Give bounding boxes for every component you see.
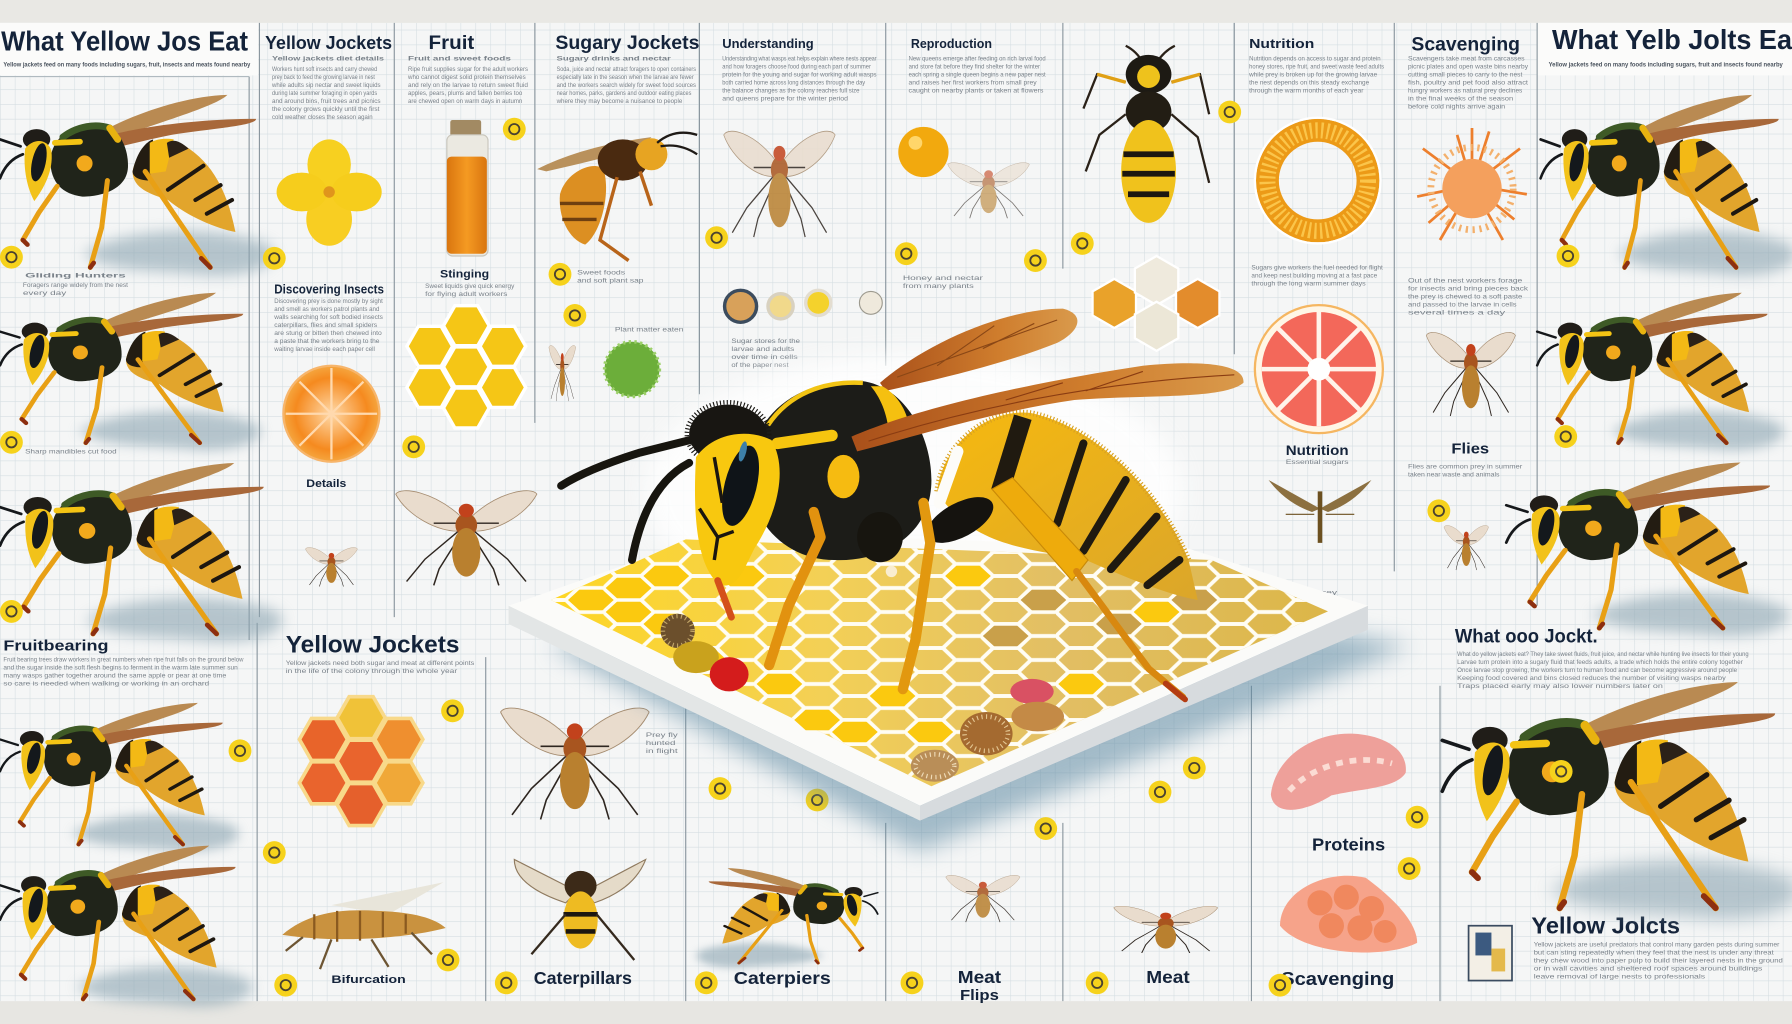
text block: scavenging top: fish, poultry and pet food also attract [1408,80,1528,87]
heading: fruitbearing: Fruitbearing [3,638,109,654]
text block: sugary middle: in flight [646,748,678,755]
text block: upper right [1457,651,1749,690]
text block: yellow jockets lower: Yellow jackets need both sugar and meat at different points [286,660,474,667]
text block: column two top: cold weather closes the season again [272,114,373,121]
text block: column four top: where they may become a nuisance to people [556,98,683,105]
right column wasps [1442,95,1792,919]
label: details: Details [306,478,346,490]
text block: sugary middle: and soft plant sap [577,277,644,284]
heading: understanding: Understanding [722,37,814,51]
icon: jar of syrup [447,120,488,256]
text block: upper right: Once larvae stop growing, the workers turn to human food and can become aggressive around people [1457,667,1738,674]
icon: small hex row [1093,256,1219,351]
icon: faint insect [948,163,1029,218]
text block: sugary middle: Prey fly [646,732,679,739]
text block: scavenging middle: and passed to the larvae in cells [1408,301,1517,308]
text block: moth notes: Moths and soft prey [1246,589,1338,596]
text block: fruitbearing: many wasps gather together around the same apple or pear at one time [3,673,227,680]
text block: discovering: waiting larvae inside each paper cell [273,346,375,353]
wasp right large [1442,682,1792,919]
text block: sugary middle [577,269,984,755]
wasp 4 [0,703,239,851]
label: bifurcation: Bifurcation [331,974,406,986]
text block: sugary middle: larvae and adults [731,346,794,353]
text block: under first wasp: Gliding Hunters [25,273,127,280]
icon: spider-like fly [1426,332,1515,416]
icon: small bug [305,548,357,587]
food morsels [661,614,1064,782]
text block: under first wasp: every day [23,290,68,297]
icon: long-legged insect [396,491,537,585]
text block: discovering: a paste that the workers bring to the [274,338,380,345]
lower wing [851,363,1244,451]
upper wing [880,309,1077,391]
icon: top-down wasp [1083,46,1209,223]
text block: nutrition middle: and keep nest building moving at a fast pace [1251,273,1378,280]
text block: column six top: caught on nearby plants or taken at flowers [909,88,1043,95]
text block: discovering: Discovering prey is done mostly by sight [274,298,383,305]
text block: scavenging top: in the final weeks of the season [1408,96,1514,103]
text block: column six top [909,56,1046,95]
coin markers [0,101,1579,997]
icon: salmon eggs [1280,876,1417,952]
text block: column eight top: honey stores, ripe fruit, and sweet waste feed adults [1249,64,1384,71]
thorax [749,381,931,577]
text block: column two top: Workers hunt soft insects and carry chewed [272,66,378,73]
honeycomb cells [551,539,1328,786]
text block: scavenging top: Scavengers take meat from carcasses [1408,56,1525,63]
text block: column eight top: Nutrition depends on access to sugar and protein [1249,56,1381,63]
text block: column six top: and raises her first workers from small prey [909,80,1037,87]
central honeycomb tray [509,531,1411,851]
text block: scavenging middle: several times a day [1408,309,1507,316]
wasp 5 [0,846,252,1007]
text block: column three top: who cannot digest solid protein themselves [407,74,526,81]
text block: under first wasp [23,273,128,297]
text block: upper right: Larvae turn protein into a sugary fluid that feeds adults, a trade which holds the entire colony together [1457,659,1744,666]
label: nutrition: Nutrition [1286,443,1349,458]
central yellow jacket [561,309,1244,699]
label: stinging: Stinging [440,269,489,281]
heading: fruit: Fruit [429,32,475,54]
text block: column four top: Sugary drinks and nectar [557,56,672,63]
text block: column five top: the balance changes as the colony reaches full size [722,88,860,95]
text block: lower right [1534,941,1783,980]
text block: column three top: and rely on the larvae to return sweet fluid [408,82,528,89]
text block: column two top: the colony grows quickly until the first [272,106,380,113]
icon: spindly bug [1114,906,1218,953]
heading: nutrition: Nutrition [1249,37,1314,51]
label: proteins: Proteins [1312,834,1385,854]
text block: column two top: prey back to feed the growing larvae in nest [272,74,375,81]
text block: column three top: Ripe fruit supplies sugar for the adult workers [408,66,528,73]
icon: small picture [1469,926,1512,981]
icon: orange burst [1417,128,1527,240]
text block: discovering: caterpillars, flies and small spiders [274,322,377,329]
text block: column six top: and store fat before they find shelter for the winter [909,64,1041,71]
text block: column three top [407,56,528,105]
text block: scavenging middle: for insects and bring pieces back [1408,285,1529,292]
text block: upper right: Traps placed early may also lower numbers later on [1457,683,1663,690]
text block: column six top: each spring a single queen begins a new paper nest [909,72,1046,79]
text block: column two top: during late summer foraging in open yards [272,90,377,97]
white glow behind hero [646,354,1183,629]
icon: fly [501,708,649,819]
haunch [920,488,1000,552]
abdomen [937,413,1198,600]
label: flips: Flips [960,988,999,1004]
text block: sugary middle: from many plants [903,283,974,290]
text block: sugary middle: Honey and nectar [903,275,984,282]
text block: discovering: and smell as workers patrol plants and [274,306,380,313]
tray board [509,531,1368,806]
heading: scavenging: Scavenging [1411,33,1520,55]
text block: sugary middle: hunted [646,740,676,747]
heading: yellow jockets lower: Yellow Jockets [286,632,459,659]
text block: under jar: for flying adult workers [425,291,507,298]
text block: scavenging middle: the prey is chewed to a soft paste [1408,293,1523,300]
title: What Yellow Jos Eat [1,25,248,56]
icon: yellow wasp [697,868,878,968]
icon row: small badges [725,290,882,322]
text block: scavenging middle: Flies are common prey in summer [1408,464,1523,471]
left column wasps [0,95,282,1007]
text block: column three top: apples, pears, plums and fallen berries too [408,90,523,97]
text block: sugary middle: Plant matter eaten [615,326,684,333]
tray shadow [549,594,1411,851]
text block: column five top: and queens prepare for the winter period [722,96,848,103]
wasp 3 [0,463,282,642]
text block: sugary middle: over time in cells [731,354,798,361]
heading: sugary: Sugary Jockets [555,32,699,54]
text block: moth notes: Essential sugars [1286,459,1349,466]
icon: amber wasp [537,133,697,261]
subtitle left: Yellow jackets feed on many foods including sugars, fruit, insects and meats found nearby [3,61,250,68]
text block: column eight top [1248,56,1384,95]
text block: column four top: especially late in the season when the larvae are fewer [557,74,694,81]
icon: grapefruit [1255,305,1383,433]
text block: sugary middle: of the paper nest [731,362,789,369]
text block: lower right: but can sting repeatedly when they feel that the nest is under any threat [1534,949,1774,956]
text block: scavenging middle: Out of the nest workers forage [1408,277,1523,284]
icon: bee [514,859,646,960]
text block: column eight top: the nest depends on this steady exchange [1249,80,1370,87]
heading: what jockets: What ooo Jockt. [1455,625,1598,647]
text block: moth notes [1246,459,1349,604]
text block: scavenging middle [1408,277,1529,479]
icon: moth [1269,480,1371,543]
label: flies: Flies [1451,442,1489,458]
icon: small wasp [1444,526,1489,570]
text block: nutrition middle: Sugars give workers the fuel needed for flight [1251,265,1383,272]
text block: scavenging top: picnic plates and open waste bins nearby [1408,64,1529,71]
head [687,402,780,617]
text block: scavenging top: hungry workers as natural prey declines [1408,88,1522,95]
text block: column eight top: while prey is broken up for the growing larvae [1248,72,1378,79]
label: caterpiers: Caterpiers [734,968,831,988]
antennae [561,440,690,560]
text block: moth notes: also feed larvae [1246,597,1326,604]
text block: column four top: near homes, parks, gardens and outdoor eating places [557,90,691,97]
text block: under first wasp: Foragers range widely from the nest [23,282,128,289]
label: caterpillars: Caterpillars [534,968,632,988]
text block: column two top: while adults sip nectar and sweet liquids [271,82,381,89]
text block: column five top: Understanding what wasps eat helps explain where nests appear [722,56,877,63]
label: meat and flies: Meat [958,967,1001,987]
text block: under jar: Sweet liquids give quick energy [425,283,515,290]
wasp right 2 [1537,293,1784,450]
icon: orange slice [283,366,379,462]
text block: column three top: are chewed open on warm days in autumn [408,98,523,105]
text block: fruitbearing [3,657,244,688]
icon: translucent insect [724,131,835,237]
text block: scavenging top: cutting small pieces to carry to the nest [1408,72,1523,79]
heading: discovering: Discovering Insects [274,283,384,297]
text block: column two top: and around bins, fruit trees and picnics [272,98,381,105]
text block: column five top: protein for the young and sugar for working adult wasps [722,72,877,79]
text block: scavenging top: before cold nights arrive again [1408,104,1506,111]
text block: under second wasp: Sharp mandibles cut food [25,449,117,456]
text block: column four top: Soda, juice and nectar attract foragers to open containers [557,66,696,73]
icon: golden ring [1255,118,1381,243]
text block: column eight top: through the warm months of each year [1249,88,1364,95]
text block: fruitbearing: and the sugar inside the soft flesh begins to ferment in the warm late summer sun [3,665,238,672]
text block: scavenging middle: taken near waste and animals [1408,472,1499,479]
wasp 1 [0,95,274,276]
red honeycomb [299,697,423,826]
wasp right 1 [1541,95,1792,276]
text block: yellow jockets lower: in the life of the colony through the whole year [286,668,458,675]
icon: brown insect [282,882,446,969]
text block: nutrition middle: through the long warm summer days [1251,281,1366,288]
text block: lower right: or in wall cavities and sheltered roof spaces around buildings [1534,965,1762,972]
wasp right 3 [1506,462,1789,636]
text block: yellow jockets lower [286,660,474,675]
text block: column two top [271,56,385,121]
text block: scavenging top [1408,56,1529,111]
text block: fruitbearing: so care is needed when walking or working in an orchard [3,681,210,688]
text block: lower right: they chew wood into paper pulp to build their layered nests in the ground [1534,957,1783,964]
text block: column four top: and the workers search widely for sweet food sources [557,82,696,89]
text block: fruitbearing: Fruit bearing trees draw workers in great numbers when ripe fruit falls on the ground below [3,657,244,664]
text block: column five top: and how foragers choose food during each part of summer [722,64,872,71]
text block: lower right: Yellow jackets are useful predators that control many garden pests during summer [1534,941,1780,948]
icon: raw meat [1271,734,1406,810]
icon: locust [946,875,1020,922]
heading: reproduction: Reproduction [911,37,992,51]
icon: yellow flower [277,139,382,246]
icon: yellow honeycomb cluster [407,306,526,428]
heading: yellow jolcts: Yellow Jolcts [1531,913,1680,939]
icon: pale fly [549,345,576,401]
title repeat: What Yelb Jolts Ea [1552,24,1792,55]
icon: green ball [605,342,659,397]
icon: orange ball [898,127,949,177]
text block: column two top: Yellow jackets diet details [272,56,385,63]
text block: under jar [425,283,515,298]
label: meat: Meat [1146,967,1190,987]
text block: column three top: Fruit and sweet foods [408,56,512,63]
text block: column six top: New queens emerge after feeding on rich larval food [909,56,1046,63]
wasp 2 [0,293,260,450]
text block: sugary middle: Sugar stores for the [731,338,801,345]
text block: upper right: Keeping food covered and bins closed reduces the number of visiting wasps nearby [1457,675,1727,682]
text block: discovering [273,298,383,353]
heading: yellow jockets: Yellow Jockets [265,32,392,53]
text block: column five top: both carried home across long distances through the day [722,80,866,87]
text block: upper right: What do yellow jackets eat? They take sweet fluids, fruit juice, and nectar while hunting live insects for their young [1457,651,1749,658]
text block: column four top [556,56,696,105]
text block: nutrition middle [1251,265,1383,288]
text block: discovering: walls searching for soft bodied insects [273,314,383,321]
legs [769,478,1185,699]
text block: discovering: are stung or bitten then chewed into [274,330,382,337]
text block: lower right: leave removal of large nests to professionals [1534,973,1705,980]
text block: sugary middle: Sweet foods [577,269,625,276]
label: scavenging: Scavenging [1281,968,1394,989]
text block: column five top [722,56,877,103]
